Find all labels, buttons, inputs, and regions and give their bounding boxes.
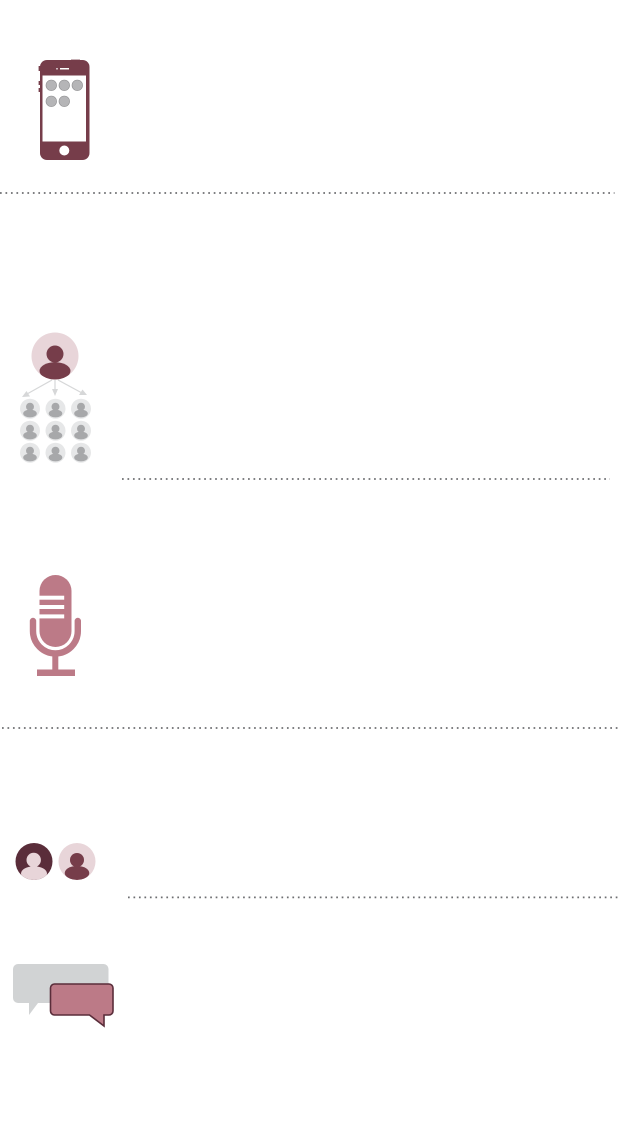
divider: dotted line 1 bbox=[0, 192, 614, 194]
divider: dotted line 2 bbox=[122, 478, 610, 480]
icon: smartphone bbox=[39, 60, 90, 160]
icon: speech bubbles bbox=[13, 964, 113, 1026]
icon: pink bubble bbox=[50, 984, 113, 1026]
icon: microphone bbox=[33, 575, 78, 676]
icon: two people bbox=[16, 843, 96, 881]
divider: dotted line 3 bbox=[2, 727, 618, 729]
icon: dark person bbox=[16, 843, 52, 881]
icon: audience grid bbox=[20, 399, 91, 463]
divider: dotted line 4 bbox=[128, 896, 618, 898]
icon: one person broadcasting to many people bbox=[20, 332, 91, 463]
arrows: fan-out bbox=[22, 380, 87, 397]
icon: main person bbox=[32, 332, 78, 380]
icon: grey bubble bbox=[13, 964, 108, 1015]
icon: light person bbox=[58, 843, 96, 880]
